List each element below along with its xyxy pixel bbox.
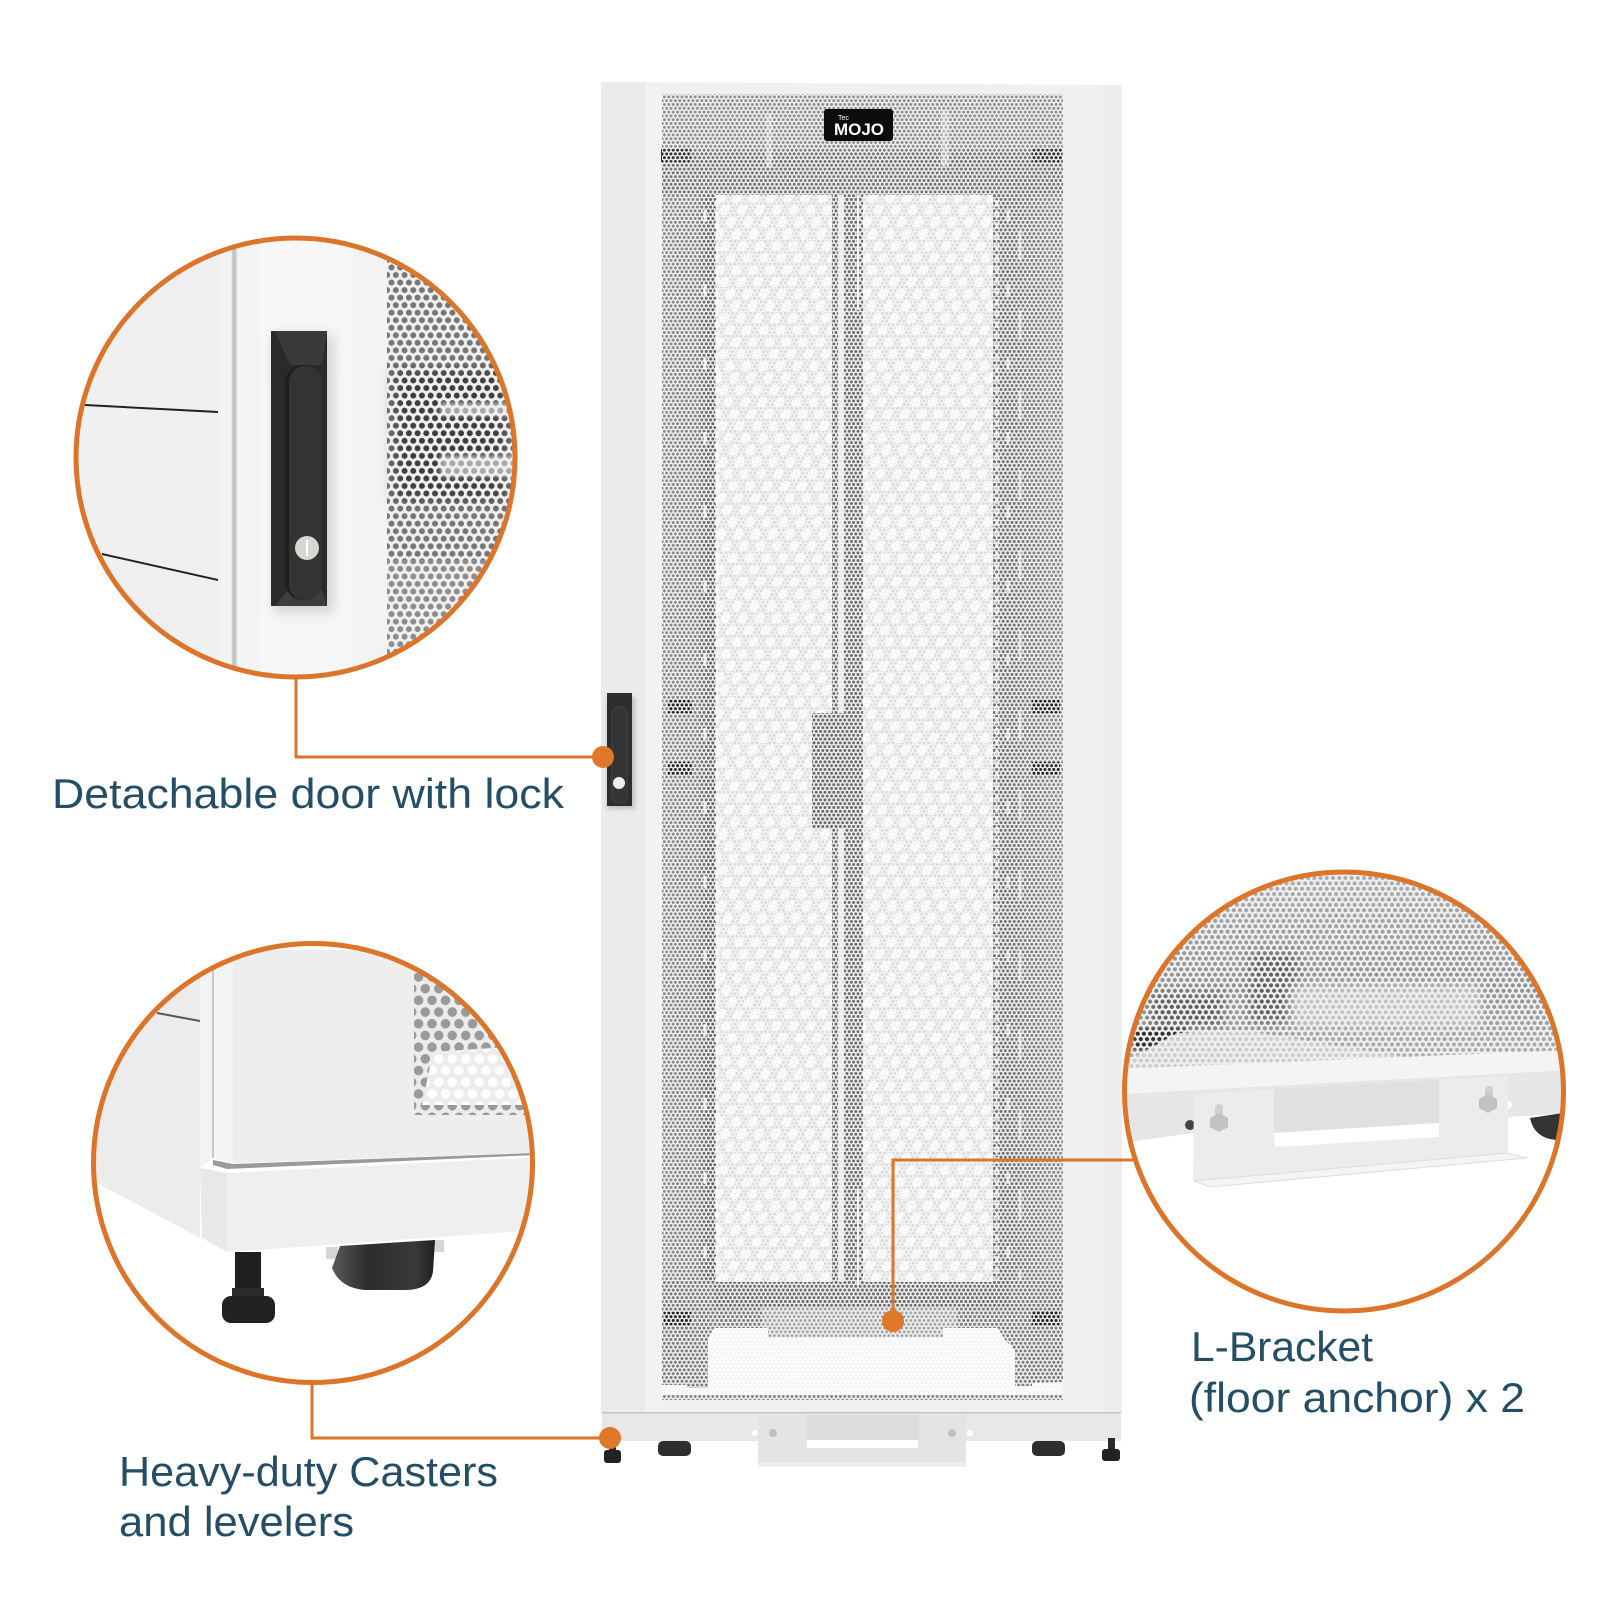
label: casters and levelers: and levelers bbox=[119, 1498, 354, 1545]
door frame bbox=[601, 82, 1122, 1413]
brand logo bbox=[824, 109, 893, 141]
brand logo: MOJO bbox=[834, 120, 884, 139]
plinth base bbox=[602, 1412, 1121, 1441]
label: L-bracket: L-Bracket bbox=[1191, 1323, 1373, 1370]
callout leader: L-bracket bbox=[882, 1160, 1133, 1332]
bracket bbox=[1193, 1076, 1527, 1187]
front casters bbox=[658, 1441, 1065, 1456]
label: casters and levelers: Heavy-duty Casters bbox=[119, 1448, 498, 1495]
leveler foot bbox=[222, 1252, 275, 1323]
caster wheel bbox=[326, 1240, 444, 1290]
server cabinet front view bbox=[601, 82, 1122, 1467]
label: L-bracket bbox=[1189, 1323, 1525, 1421]
callout leader: door lock bbox=[296, 679, 614, 768]
L-bracket front bbox=[752, 1415, 973, 1467]
label: door lock: Detachable door with lock bbox=[52, 770, 565, 817]
label: L-bracket: (floor anchor) x 2 bbox=[1189, 1374, 1525, 1421]
callout circle: casters and levelers close-up bbox=[85, 944, 540, 1382]
brand logo: Tec bbox=[838, 115, 849, 122]
perforated door panel bbox=[661, 94, 1063, 1400]
label: casters and levelers bbox=[119, 1448, 498, 1545]
callout leader: casters bbox=[312, 1385, 621, 1449]
levelers bbox=[604, 1438, 1120, 1463]
callout circle: door lock close-up bbox=[70, 230, 530, 685]
door handle bbox=[607, 693, 635, 809]
callout circle: L-bracket close-up bbox=[1120, 865, 1570, 1311]
rear caster bbox=[1530, 1114, 1560, 1140]
lock handle bbox=[271, 331, 334, 613]
